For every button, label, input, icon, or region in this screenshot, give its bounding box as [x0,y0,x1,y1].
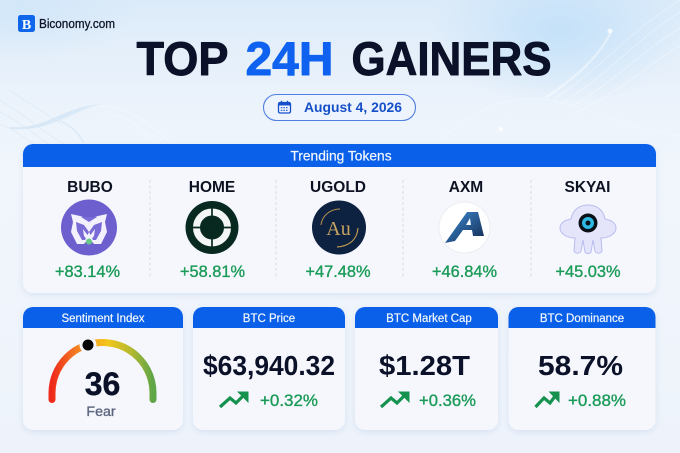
panel: BTC market cap [355,307,498,430]
panel header: trending tokens [23,144,656,167]
token: UGOLD: UGOLD [310,179,366,196]
panel header: BTC market cap [355,307,498,328]
token: HOME [180,179,245,281]
gauge value: 36 [85,366,120,402]
token: UGOLD: +47.48% [305,263,371,281]
icon: UGOLD Au coin: Au [326,218,351,240]
value: $63,940.32 [203,350,335,381]
token: SKYAI: SKYAI [565,179,610,196]
panel header: BTC dominance: BTC Dominance [540,313,624,325]
gauge chart [52,336,153,400]
icon: SKYAI jellyfish [560,205,616,254]
token: BUBO: +83.14% [55,263,120,281]
token: UGOLD [305,179,371,281]
gauge label: Fear [86,404,116,420]
icon: AXM logo [439,202,490,253]
title: GAINERS [352,32,552,85]
change: +0.88% [568,392,626,410]
icon: trend arrow [381,392,410,407]
token: AXM [432,179,497,281]
panel header: sentiment index: Sentiment Index [61,313,145,325]
token: HOME: +58.81% [180,263,245,281]
change: +0.36% [419,392,476,410]
token: BUBO [55,179,120,281]
token: HOME: HOME [189,179,235,196]
panel: BTC dominance [508,307,656,430]
panel header: BTC price: BTC Price [243,313,295,325]
token: SKYAI: +45.03% [555,263,621,281]
title [136,32,552,85]
panel header: sentiment index [23,307,183,328]
value: $1.28T [379,350,470,381]
panel: BTC price [193,307,345,430]
icon: trend arrow [536,392,560,407]
icon: calendar [278,101,290,113]
token: SKYAI [555,179,621,281]
date pill: August 4, 2026 [304,99,402,115]
panel: trending tokens [23,144,656,293]
panel header: BTC market cap: BTC Market Cap [386,313,472,325]
date pill [264,94,416,120]
logo: Biconomy.com [18,15,115,33]
panel header: trending tokens: Trending Tokens [290,148,392,164]
change: +0.32% [260,392,318,410]
panel: sentiment index [23,307,183,430]
title: TOP [136,32,228,85]
token: AXM: AXM [449,179,483,196]
token: AXM: +46.84% [432,263,497,281]
icon: HOME ring [186,201,238,254]
token: BUBO: BUBO [67,179,113,196]
title: 24H [246,32,334,85]
icon: BUBO owl [61,200,117,256]
logo: Biconomy.com: Biconomy.com [39,16,115,31]
value: 58.7% [538,350,623,381]
panel header: BTC price [193,307,345,328]
icon: Biconomy logo: B [22,18,31,33]
panel header: BTC dominance [508,307,656,328]
icon: trend arrow [220,392,248,407]
